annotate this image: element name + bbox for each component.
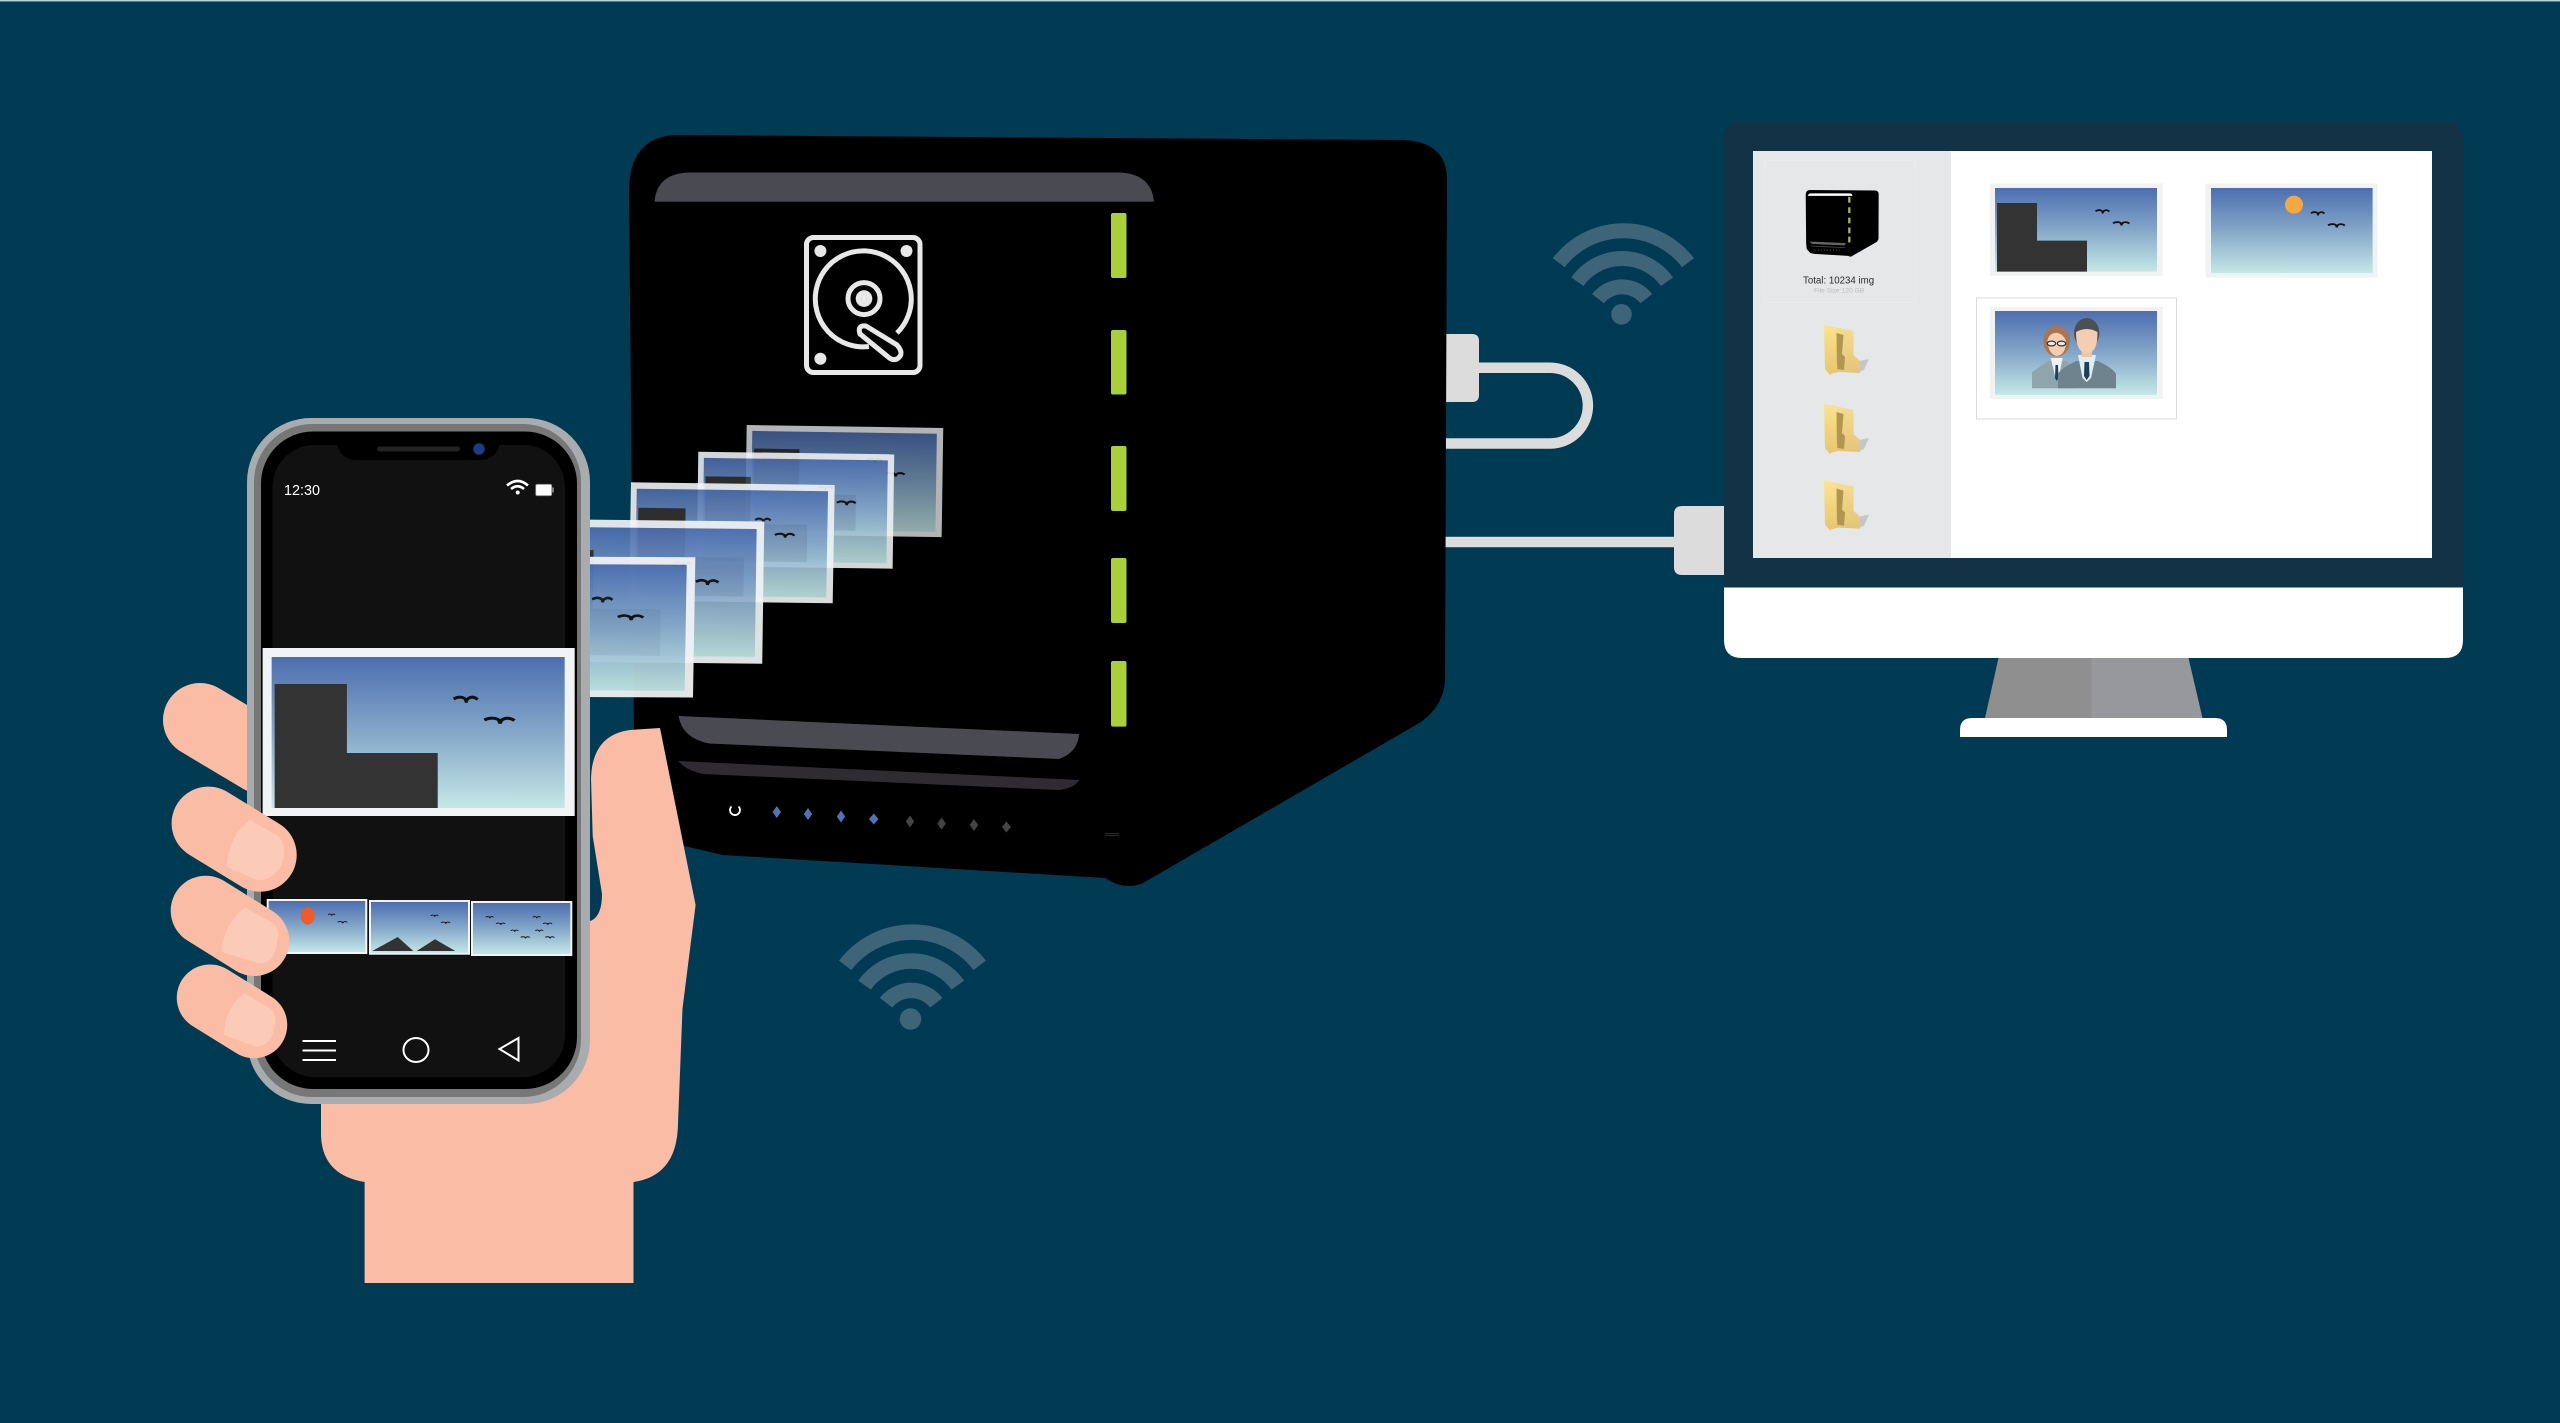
NAS power and activity lights — [730, 806, 1119, 836]
thumbnail: flock — [471, 901, 572, 956]
icon: folder — [1824, 324, 1869, 375]
monitor chin — [1724, 580, 2463, 658]
phone casing — [247, 418, 590, 1104]
file size label: File Size:120 GB — [1814, 288, 1865, 294]
phone clock: 12:30 — [284, 483, 320, 499]
hand: index finger behind phone — [200, 720, 262, 757]
NAS enclosure — [629, 135, 1447, 886]
photos moving from phone to NAS — [429, 425, 943, 698]
photo stack: front — [429, 556, 695, 698]
app sidebar — [1753, 151, 1951, 558]
icon: wifi status — [507, 481, 528, 494]
photo stack: second — [529, 519, 764, 664]
main photo on phone — [263, 648, 575, 816]
selected gallery item — [1976, 298, 2176, 419]
monitor stand — [1985, 658, 2202, 718]
cable: NAS to monitor with plug — [1440, 506, 1724, 575]
icon: home button — [404, 1038, 428, 1062]
monitor base — [1960, 718, 2227, 737]
phone notch with speaker and camera — [336, 440, 501, 460]
icon: battery — [536, 484, 554, 496]
smartphone — [247, 418, 590, 1104]
finger with nail — [206, 907, 278, 963]
man figure — [2058, 318, 2116, 388]
cable: looped cable with plug at NAS — [1440, 334, 1588, 444]
NAS device — [629, 135, 1447, 886]
gallery photo: sun — [2206, 184, 2378, 278]
monitor bezel — [1724, 122, 2463, 588]
wifi icon: phone link — [845, 932, 980, 1030]
finger with nail — [210, 993, 275, 1047]
icon: back button — [500, 1038, 518, 1060]
icon: folder — [1824, 480, 1869, 531]
hand: three fingers over phone — [206, 820, 284, 1047]
desktop monitor — [1724, 122, 2463, 737]
woman figure — [2032, 326, 2074, 388]
photo stack: fourth — [697, 452, 894, 569]
gallery photo: building — [1990, 184, 2163, 276]
NAS status bars — [1111, 213, 1126, 727]
gallery photo: portrait of two people — [1990, 307, 2163, 399]
NAS drive slots — [679, 716, 1079, 790]
total count label: Total: 10234 img — [1803, 276, 1874, 286]
monitor screen — [1753, 151, 2432, 558]
icon: folder — [1824, 404, 1869, 454]
NAS top bezel — [654, 172, 1154, 202]
wifi icon: monitor link — [1559, 231, 1688, 325]
photo stack: third — [629, 482, 835, 603]
icon: hard drive — [806, 238, 920, 372]
thumbnail: mountains — [369, 900, 470, 955]
thumbnail: sun — [267, 899, 367, 954]
phone screen — [272, 445, 565, 1077]
hand: palm, wrist and thumb — [321, 728, 696, 1283]
mini NAS thumbnail — [1806, 190, 1879, 257]
icon: menu button — [302, 1041, 336, 1060]
photo stack: back — [745, 425, 943, 537]
finger with nail — [208, 820, 284, 880]
